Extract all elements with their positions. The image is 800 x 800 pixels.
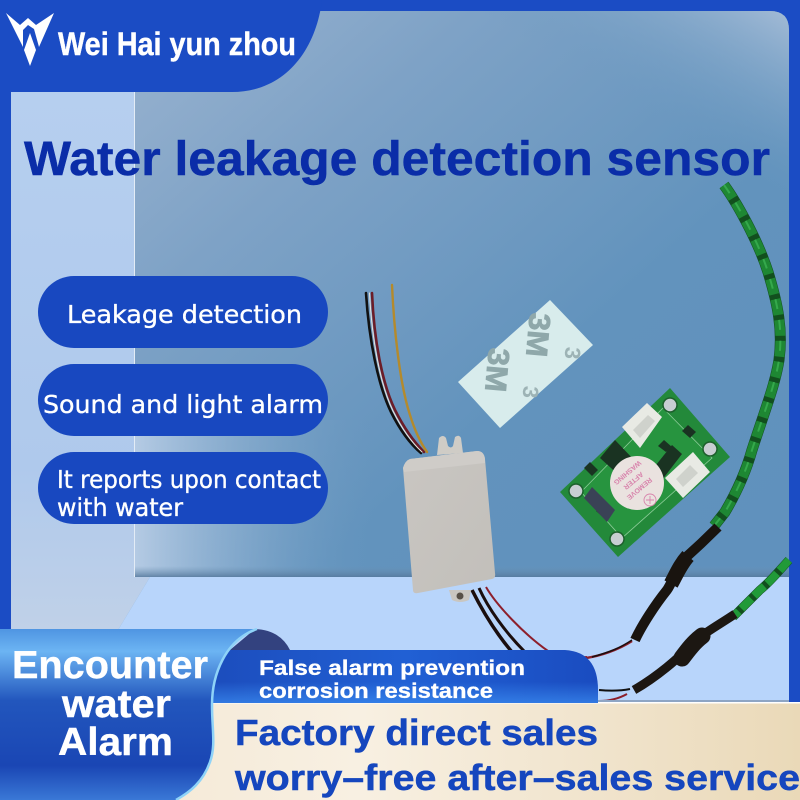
lead wires upper [586,641,632,658]
grey sensor enclosure [403,436,587,657]
3M adhesive tape: 3M [519,312,556,358]
icon: logo mark [6,13,54,66]
feature band: False alarm prevention [259,657,525,680]
circuit board module [560,388,730,557]
alarm callout [0,629,257,800]
twisted green probe wire, short [599,560,789,701]
feature band: corrosion resistance [259,680,493,703]
pill: leakage detection: Leakage detection [67,300,302,329]
footer slogan [234,712,800,798]
cream footer panel [170,703,800,800]
3M adhesive tape: 3 [560,346,586,360]
light side panel [11,92,150,630]
3M adhesive tape: 3 [518,385,544,399]
footer slogan: worry–free after–sales service [234,757,800,798]
pill: reports on contact: It reports upon contact [57,465,321,494]
buzzer: REMOVE [625,476,653,501]
mount tabs [437,436,463,455]
alarm callout: Encounter [12,644,208,687]
feature pills [38,276,328,524]
lead wires lower [599,689,630,691]
floor surface [118,577,789,703]
title: Water leakage detection sensor [24,133,770,186]
logo tab [0,0,322,800]
black sleeve upper [635,527,718,640]
floor edge line [598,700,789,702]
navy corner accent [230,629,290,650]
pill: leakage detection [38,276,328,348]
header socket [584,487,615,522]
buzzer [610,456,664,510]
feature band [213,650,598,703]
mounting holes [569,398,717,546]
buzzer: WASHING [611,459,642,486]
footer slogan: Factory direct sales [235,712,598,753]
black sleeve lower [634,614,735,690]
bottom lug [449,590,471,602]
alarm callout: Alarm [58,721,173,764]
signal wires at sensor top [366,285,427,453]
3M adhesive tape: 3M [478,347,515,393]
3M adhesive tape [458,300,593,428]
wires below sensor [472,587,587,657]
alarm callout: water [61,683,171,726]
dark components [584,425,696,518]
pill: reports on contact: with water [57,493,184,522]
pill: sound and light alarm [38,364,328,436]
pill: sound and light alarm: Sound and light alarm [43,390,323,419]
buzzer: AFTER [622,470,644,490]
pill: reports on contact [38,452,328,524]
connector top [622,403,662,448]
connector bottom [665,452,710,498]
twisted green probe wire, long [586,185,780,658]
brand name: Wei Hai yun zhou [58,26,296,62]
logo [6,13,296,66]
